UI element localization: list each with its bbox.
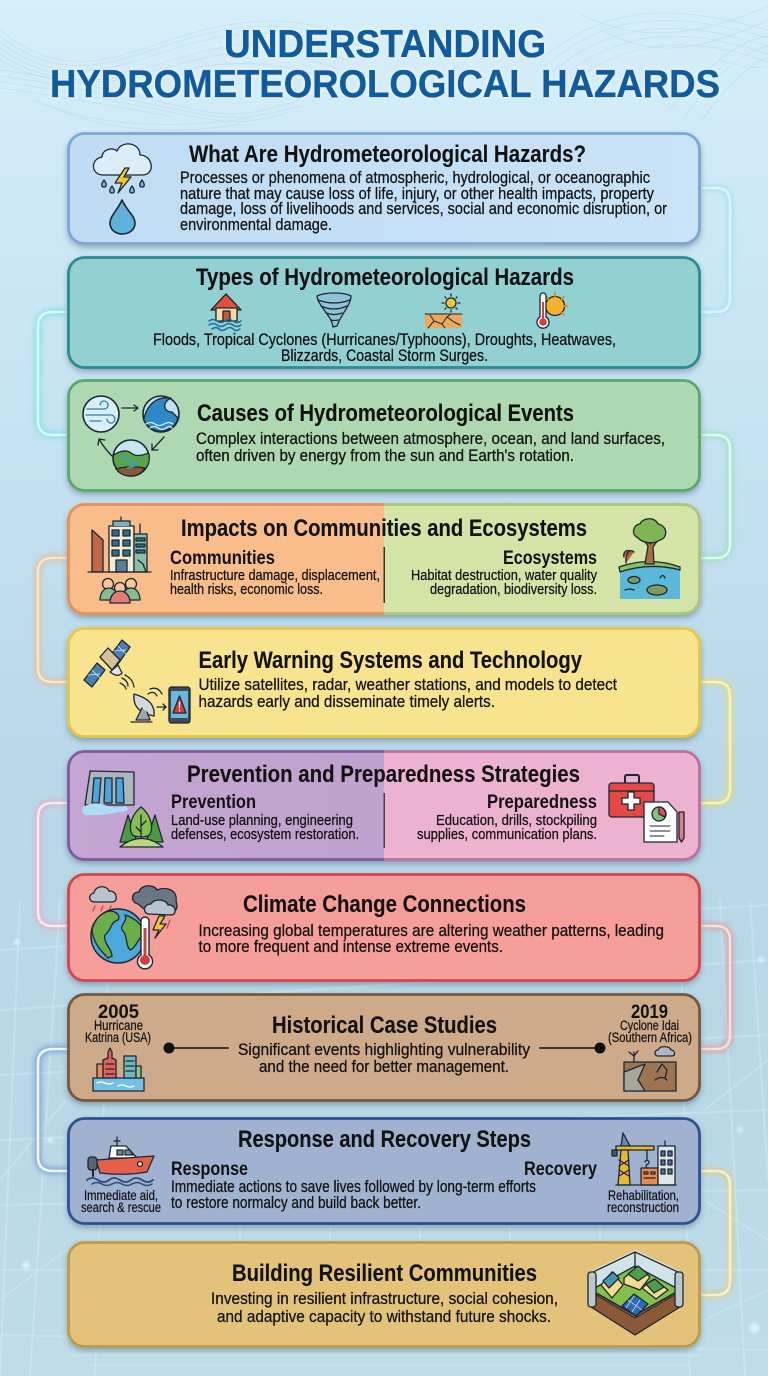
icon: protected community (588, 1252, 683, 1335)
description: Utilize satellites, radar, weather stations, and models to detect (198, 676, 617, 694)
description: Blizzards, Coastal Storm Surges. (281, 347, 488, 365)
description: and the need for better management. (259, 1058, 509, 1076)
description: to restore normalcy and build back better. (171, 1194, 421, 1212)
icon: flood house (209, 294, 241, 330)
icon: drought (425, 294, 462, 328)
description: Processes or phenomena of atmospheric, hydrological, or oceanographic (180, 169, 650, 187)
icon: globe, clouds and thermometer (90, 886, 177, 969)
event: 2005: 2005 (98, 1002, 139, 1023)
sub-column: ecosystems: Habitat destruction, water quality (411, 567, 597, 584)
caption: response: search & rescue (81, 1200, 161, 1215)
heading: Causes of Hydrometeorological Events (197, 400, 574, 427)
sub-column: preparedness (417, 792, 597, 843)
connector: panel 7 to 8 (701, 926, 730, 1049)
sub-column: preparedness: supplies, communication plans. (417, 826, 597, 843)
icon: first aid kit and plan document (609, 775, 684, 842)
description (180, 169, 667, 234)
heading: Early Warning Systems and Technology (198, 647, 582, 674)
connector: panel 6 to 7 (38, 803, 68, 926)
connector: panel 3 to 4 (701, 435, 730, 558)
timeline: right (539, 1042, 606, 1054)
description (171, 1178, 536, 1212)
heading: Types of Hydrometeorological Hazards (196, 264, 574, 291)
caption: recovery: reconstruction (607, 1200, 679, 1215)
icon: storm cloud and water drop (93, 144, 151, 234)
icon: tree and wetland (619, 519, 680, 599)
event: 2005 (85, 1002, 151, 1045)
icon: damaged city and people (88, 517, 151, 603)
heading: Response and Recovery Steps (238, 1126, 531, 1153)
description: Increasing global temperatures are altering weather patterns, leading (198, 922, 664, 940)
icon: crane and building (612, 1133, 676, 1185)
panel: what are hazards (68, 134, 700, 244)
sub-heading: recovery: Recovery (524, 1159, 597, 1180)
heading: Climate Change Connections (243, 891, 526, 918)
sub-column: communities: Infrastructure damage, displacement, (170, 567, 380, 584)
description (198, 922, 664, 956)
sub-column: prevention: defenses, ecosystem restoration. (171, 826, 359, 843)
timeline: left (164, 1042, 229, 1054)
connector: panel 9 to 10 (701, 1171, 730, 1295)
heading: Historical Case Studies (272, 1012, 497, 1039)
sub-column: communities (170, 548, 380, 598)
connector: panel 4 to 5 (38, 558, 68, 682)
description: Complex interactions between atmosphere, ocean, and land surfaces, (196, 430, 665, 448)
panel: resilient communities (68, 1242, 700, 1346)
icon: satellite, dish and phone (84, 640, 190, 723)
event: 2005: Katrina (USA) (85, 1030, 151, 1045)
sub-column: prevention: Land-use planning, engineering (171, 812, 353, 829)
connector: panel 5 to 6 (701, 682, 730, 803)
panel: early warning (68, 628, 700, 736)
description: hazards early and disseminate timely alerts. (198, 693, 495, 711)
description: Immediate actions to save lives followed by long-term efforts (171, 1178, 536, 1196)
description: damage, loss of livelihoods and services, social and economic disruption, or (180, 200, 667, 218)
event: 2019: Cyclone Idai (620, 1018, 679, 1033)
description: environmental damage. (180, 216, 332, 234)
icon: rescue boat (87, 1137, 154, 1186)
description: Investing in resilient infrastructure, social cohesion, (211, 1290, 558, 1308)
panel: historical case studies (68, 994, 700, 1100)
sub-column: ecosystems (411, 548, 597, 598)
icon: water cycle (83, 396, 179, 476)
description: often driven by energy from the sun and Earth's rotation. (196, 447, 574, 465)
caption: recovery (607, 1188, 679, 1215)
sub-column: ecosystems: degradation, biodiversity loss. (430, 581, 597, 598)
icon: tornado (317, 293, 351, 327)
description: and adaptive capacity to withstand future shocks. (217, 1308, 551, 1326)
description (211, 1290, 558, 1326)
icon: dam and trees (82, 771, 163, 847)
connector: panel 2 to 3 (38, 312, 68, 435)
title: UNDERSTANDING (224, 23, 546, 66)
description (238, 1041, 531, 1076)
sub-column: prevention (171, 792, 359, 843)
description: nature that may cause loss of life, injury, or other health impacts, property (180, 185, 655, 203)
sub-column: ecosystems: Ecosystems (503, 548, 597, 569)
panel: response and recovery (68, 1118, 700, 1224)
heading: What Are Hydrometeorological Hazards? (189, 141, 586, 168)
caption: response (81, 1188, 161, 1215)
sub-column: preparedness: Education, drills, stockpiling (436, 812, 597, 829)
caption: recovery: Rehabilitation, (608, 1188, 679, 1203)
panel: climate change (68, 874, 700, 980)
description (198, 676, 617, 711)
sub-column: communities: Communities (170, 548, 275, 569)
panel: types (68, 258, 700, 368)
sub-column: preparedness: Preparedness (487, 792, 597, 813)
title: HYDROMETEOROLOGICAL HAZARDS (50, 63, 720, 106)
sub-heading: response: Response (171, 1159, 248, 1180)
description: to more frequent and intense extreme events. (198, 938, 503, 956)
event: 2019: 2019 (631, 1002, 668, 1023)
icon: cyclone damage (624, 1047, 676, 1091)
panel: causes (68, 380, 700, 490)
caption: response: Immediate aid, (84, 1188, 158, 1203)
icon: flooded city (93, 1048, 144, 1091)
icon: thermometer and sun (537, 293, 567, 328)
event: 2019 (608, 1002, 692, 1045)
panel: impacts (68, 504, 700, 614)
description: Significant events highlighting vulnerability (238, 1041, 531, 1059)
description (196, 430, 665, 465)
connector: panel 8 to 9 (38, 1049, 68, 1171)
event: 2019: (Southern Africa) (608, 1030, 692, 1045)
heading: Prevention and Preparedness Strategies (187, 761, 580, 788)
sub-column: prevention: Prevention (171, 792, 256, 813)
heading: Impacts on Communities and Ecosystems (181, 515, 587, 542)
connector: panel 1 to 2 (701, 188, 730, 312)
description (153, 331, 616, 365)
panel: prevention and preparedness (68, 752, 700, 860)
description: Floods, Tropical Cyclones (Hurricanes/Typhoons), Droughts, Heatwaves, (153, 331, 616, 349)
heading: Building Resilient Communities (232, 1260, 537, 1287)
sub-column: communities: health risks, economic loss. (170, 581, 323, 598)
title (50, 23, 720, 106)
event: 2005: Hurricane (94, 1018, 143, 1033)
